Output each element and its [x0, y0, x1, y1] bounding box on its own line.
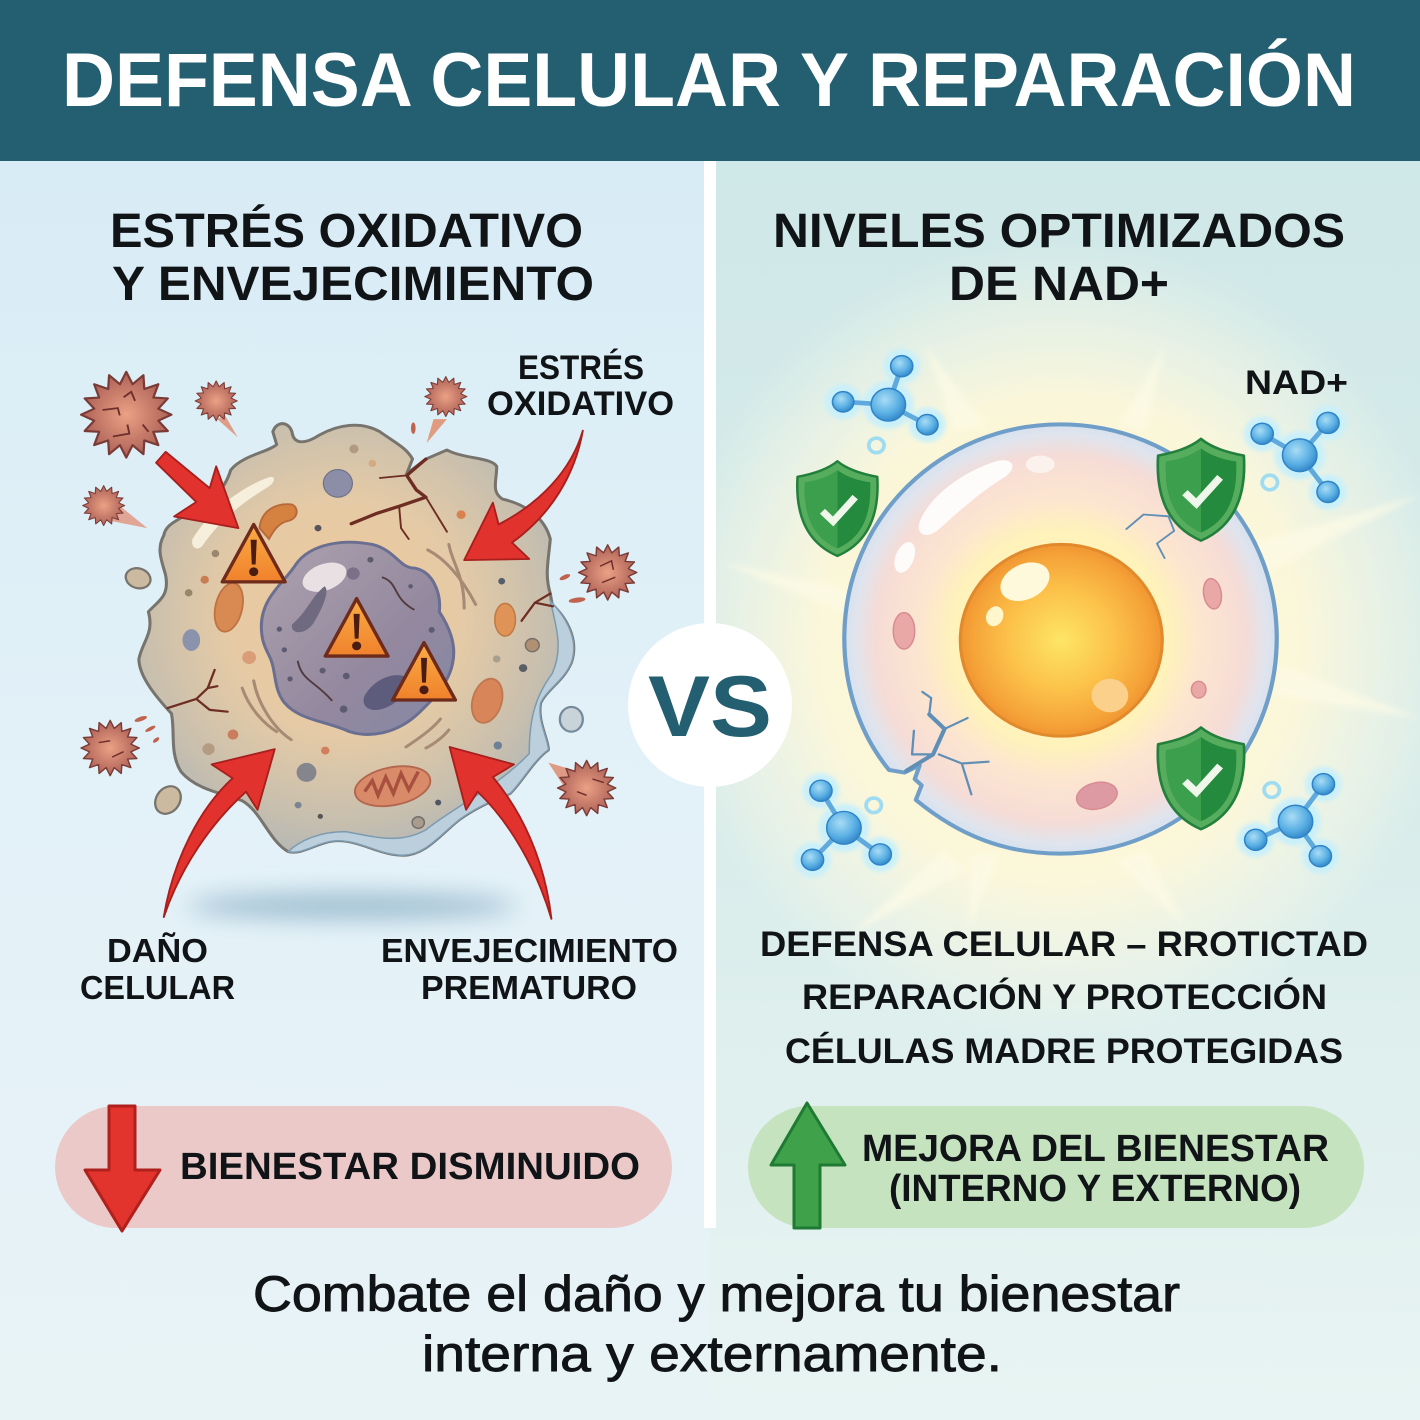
- nucleus details: [277, 557, 435, 713]
- closing message: interna y externamente.: [422, 1326, 1002, 1382]
- ground shadow under damaged cell: [187, 893, 517, 919]
- title: DEFENSA CELULAR Y REPARACIÓN: [62, 38, 1356, 123]
- closing message: Combate el daño y mejora tu bienestar: [253, 1266, 1180, 1322]
- heading: right: [773, 205, 1345, 311]
- text: BIENESTAR DISMINUIDO: [180, 1146, 640, 1188]
- warning icons: [222, 524, 285, 582]
- organelles: [210, 504, 515, 812]
- nucleus highlights: [983, 555, 1128, 712]
- vesicles: [183, 445, 539, 828]
- label: envejecimiento prematuro: PREMATURO: [421, 969, 637, 1006]
- center divider: [704, 161, 716, 1228]
- benefits list: [760, 925, 1368, 1071]
- molecule: top left: [825, 349, 946, 453]
- label: estrés oxidativo: ESTRÉS: [518, 349, 644, 387]
- label: daño celular: DAÑO: [107, 932, 208, 969]
- shield: bottom right: [1158, 727, 1244, 829]
- shield: top right: [1158, 439, 1244, 541]
- highlights: [890, 456, 1055, 575]
- heading: left: Y ENVEJECIMIENTO: [112, 258, 594, 311]
- red arrow: bottom left: [164, 749, 275, 917]
- text: [862, 1128, 1329, 1210]
- illustration: damaged cell: [81, 372, 637, 919]
- organelles: [893, 577, 1223, 814]
- oxidative particles: [81, 372, 637, 816]
- label: envejecimiento prematuro: ENVEJECIMIENTO: [381, 932, 678, 969]
- highlights: [192, 477, 274, 549]
- title banner: [0, 0, 1420, 161]
- label: NAD+: NAD+: [1245, 364, 1348, 402]
- Golgi strands: [242, 544, 476, 748]
- molecule: top right: [1244, 405, 1346, 509]
- outcome pill: improved wellbeing: [748, 1103, 1364, 1228]
- background: left panel: [0, 160, 710, 1420]
- benefits list: DEFENSA CELULAR – RROTICTAD: [760, 925, 1368, 964]
- label: daño celular: CELULAR: [80, 969, 235, 1006]
- shield: left: [797, 461, 878, 556]
- side vesicles: [123, 565, 583, 818]
- cell membrane: [844, 424, 1277, 854]
- label: daño celular: [80, 932, 235, 1006]
- heading: right: DE NAD+: [949, 258, 1169, 311]
- background: right panel: [710, 160, 1420, 1420]
- icon: up arrow: [771, 1103, 845, 1228]
- heading: left: [110, 204, 594, 311]
- warning icon: nucleus: [325, 599, 388, 656]
- red arrow: top right: [464, 431, 583, 560]
- cell body: [139, 424, 574, 855]
- warning icon: nucleus lower: [393, 643, 455, 700]
- outcome pill: decreased wellbeing: [55, 1106, 672, 1231]
- nucleus: [261, 542, 454, 734]
- background glow and light rays behind healthy cell: [716, 273, 1420, 996]
- cracks: [168, 459, 553, 712]
- membrane cracks: [906, 514, 1174, 794]
- nucleus: [960, 544, 1162, 736]
- icon: down arrow: [85, 1106, 160, 1231]
- red arrow: bottom right: [450, 747, 551, 919]
- closing message: [253, 1266, 1180, 1382]
- blue edge tint: [288, 601, 574, 855]
- label: estrés oxidativo: [487, 349, 674, 423]
- VS badge: [628, 623, 792, 787]
- text: MEJORA DEL BIENESTAR: [862, 1128, 1329, 1170]
- red arrow: top left: [156, 452, 238, 528]
- molecule: bottom right: [1237, 767, 1342, 874]
- VS badge: VS: [648, 659, 772, 755]
- label: estrés oxidativo: OXIDATIVO: [487, 385, 674, 423]
- benefits list: CÉLULAS MADRE PROTEGIDAS: [785, 1031, 1343, 1071]
- heading: left: ESTRÉS OXIDATIVO: [110, 204, 583, 258]
- text: (INTERNO Y EXTERNO): [889, 1168, 1301, 1210]
- benefits list: REPARACIÓN Y PROTECCIÓN: [802, 977, 1327, 1017]
- molecule: bottom left: [794, 773, 899, 877]
- label: envejecimiento prematuro: [381, 932, 678, 1006]
- heading: right: NIVELES OPTIMIZADOS: [773, 205, 1345, 258]
- illustration: healthy cell: [794, 349, 1346, 877]
